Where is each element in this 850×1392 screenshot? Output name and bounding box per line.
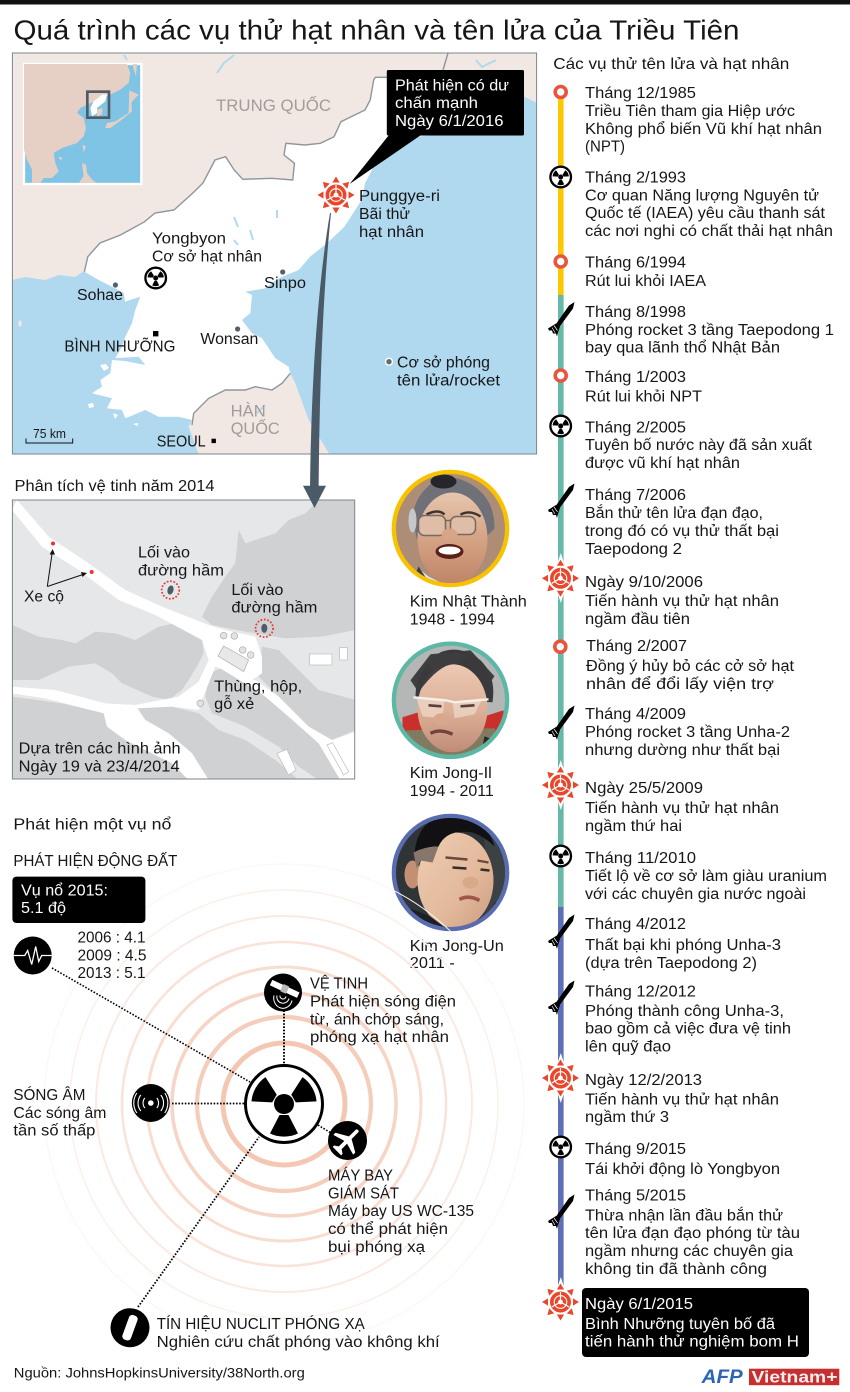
label: Yongbyon: Yongbyon xyxy=(152,231,226,248)
event: June 1994 xyxy=(555,255,707,290)
roads xyxy=(12,500,356,780)
event: July 2006: Tháng 7/2006 xyxy=(585,487,686,504)
label: sound waves xyxy=(13,1087,106,1140)
event: 25 May 2009 xyxy=(542,766,779,835)
event: November 2010: Tháng 11/2010 xyxy=(585,850,696,867)
event: February 2007 xyxy=(555,638,795,693)
label: surveillance plane: có thể phát hiện xyxy=(328,1221,448,1238)
panel frame xyxy=(12,500,355,779)
caption: Kim Jong-un xyxy=(410,938,504,972)
label: Sinpo: Sinpo xyxy=(264,275,306,292)
event: December 1985: Không phổ biến Vũ khí hạt nhân xyxy=(585,121,822,138)
portrait: Kim Jong-il xyxy=(392,642,509,759)
label: image dates: Dựa trên các hình ảnh xyxy=(19,741,181,758)
top bar xyxy=(0,0,850,4)
label: sound waves: Các sóng âm xyxy=(13,1105,106,1122)
label: Yongbyon xyxy=(152,231,262,266)
event: January 2003 xyxy=(555,369,703,406)
event: May 2015: tên lửa đạn đạo phóng từ tàu xyxy=(585,1225,800,1242)
heading: satellite analysis: Phân tích vệ tinh năm 2014 xyxy=(14,478,215,495)
seismic magnitudes: 2009 : 4.5 xyxy=(78,948,146,964)
source: Nguồn: JohnsHopkinsUniversity/38North.org xyxy=(14,1365,305,1381)
caption: Kim Il-sung: Kim Nhật Thành xyxy=(410,594,527,611)
label: radionuclide signal: TÍN HIỆU NUCLIT PHÓNG XẠ xyxy=(157,1316,365,1333)
seismic magnitudes: 2006 : 4.1 xyxy=(78,930,146,947)
inset locator map xyxy=(24,64,141,184)
event: June 1994: Tháng 6/1994 xyxy=(585,255,686,272)
event: September 2015 xyxy=(550,1137,780,1178)
label: surveillance plane xyxy=(328,1168,474,1256)
seismic magnitudes: 2013 : 5.1 xyxy=(78,965,146,982)
scale bar: 75 km xyxy=(33,427,66,441)
callout: 2015 magnitude: Vụ nổ 2015: xyxy=(21,882,108,900)
label: radionuclide signal: Nghiên cứu chất phóng vào không khí xyxy=(157,1334,440,1351)
label: Pyongyang xyxy=(64,331,175,356)
event: September 2015: Tái khởi động lò Yongbyon xyxy=(585,1161,780,1178)
borders xyxy=(84,53,448,425)
label: Pyongyang: BÌNH NHƯỠNG xyxy=(64,339,175,356)
icon: surveillance plane xyxy=(327,1120,368,1161)
label: radionuclide signal xyxy=(157,1316,440,1351)
event: July 2006: Taepodong 2 xyxy=(585,541,682,558)
dotted connectors xyxy=(52,968,331,1307)
event: February 2005: được vũ khí hạt nhân xyxy=(585,455,740,472)
event: February 2007: nhân để đổi lấy viện trợ xyxy=(586,676,774,693)
portrait: Kim Il-sung xyxy=(392,470,509,587)
West coast islands xyxy=(88,364,138,426)
event: April 2012: Thất bại khi phóng Unha-3 xyxy=(585,937,781,954)
rivers xyxy=(124,55,496,413)
event: April 2012: Tháng 4/2012 xyxy=(585,916,686,933)
event: June 1994: Rút lui khỏi IAEA xyxy=(585,273,707,290)
event: May 2015: không tin đã thành công xyxy=(585,1261,767,1278)
panel: map of North Korea xyxy=(12,53,537,455)
label: tunnel entrance 2: đường hầm xyxy=(231,600,317,617)
caption: Kim Jong-un: 2011 - xyxy=(410,955,455,972)
label: tunnel entrance 2: Lối vào xyxy=(231,582,283,599)
label: containers and lumber: Thùng, hộp, xyxy=(214,679,302,696)
event: December 2012: bao gồm cả việc đưa vệ tinh xyxy=(585,1021,791,1038)
event: 25 May 2009: Tiến hành vụ thử hạt nhân xyxy=(585,800,779,817)
callout: aftershock: Ngày 6/1/2016 xyxy=(395,113,504,130)
event: April 2012 xyxy=(548,914,781,972)
event: 25 May 2009: ngầm thứ hai xyxy=(585,818,682,835)
event: December 1985: Triều Tiên tham gia Hiệp ước xyxy=(585,103,795,120)
icon: sound waves xyxy=(132,1084,170,1122)
event: April 2009: Tháng 4/2009 xyxy=(585,706,686,723)
event: February 1993: Cơ quan Năng lượng Nguyên tử xyxy=(585,188,819,205)
label: Punggye-ri: hạt nhân xyxy=(359,224,424,241)
caption: Kim Jong-il xyxy=(410,765,494,800)
label: Yongbyon: Cơ sở hạt nhân xyxy=(152,249,262,266)
event: 12 February 2013: Tiến hành vụ thử hạt nhân xyxy=(585,1091,779,1108)
label: satellite: VỆ TINH xyxy=(310,976,368,993)
event: May 2015 xyxy=(548,1188,800,1278)
North Korea land xyxy=(84,78,388,420)
event: November 2010: Tiết lộ về cơ sở làm giàu uranium xyxy=(585,868,827,885)
event: July 2006: trong đó có vụ thử thất bại xyxy=(585,523,779,540)
event: December 2012: lên quỹ đạo xyxy=(585,1039,671,1056)
label: satellite xyxy=(310,976,456,1046)
icon: central radiation symbol xyxy=(246,1066,322,1142)
seismic magnitudes xyxy=(78,930,146,982)
event: September 2015: Tháng 9/2015 xyxy=(585,1141,686,1158)
event: February 2005: Tuyên bố nước này đã sản xuất xyxy=(585,437,813,454)
label: Sohae: Sohae xyxy=(77,287,123,304)
label: tunnel entrance 2 xyxy=(231,582,317,617)
heading: detecting an explosion: Phát hiện một vụ nổ xyxy=(13,816,171,833)
event: February 2007: Đồng ý hủy bỏ các cở sở hạt xyxy=(586,658,795,675)
label: China: TRUNG QUỐC xyxy=(216,95,331,115)
event: 9 October 2006: ngầm đầu tiên xyxy=(585,611,690,628)
event: April 2009: nhưng dường như thất bại xyxy=(585,742,780,759)
label: image dates: Ngày 19 và 23/4/2014 xyxy=(19,759,180,776)
South Korea land xyxy=(189,373,330,455)
event: August 1998: Tháng 8/1998 xyxy=(585,304,686,321)
China and Russia land xyxy=(12,53,537,280)
label: sound waves: tần số thấp xyxy=(13,1122,95,1140)
event: February 1993: Quốc tế (IAEA) yêu cầu thanh sát xyxy=(585,205,826,222)
map frame xyxy=(12,53,537,454)
heading: timeline: Các vụ thử tên lửa và hạt nhân xyxy=(553,56,789,73)
icon: Yongbyon radiation xyxy=(145,268,166,288)
event: February 2007: Tháng 2/2007 xyxy=(586,638,687,655)
label: sound waves: SÓNG ÂM xyxy=(13,1087,85,1104)
icon: satellite xyxy=(264,974,302,1012)
event: February 1993: Tháng 2/1993 xyxy=(585,170,686,187)
label: satellite: phóng xạ hạt nhân xyxy=(310,1029,449,1046)
event: July 2006 xyxy=(548,484,779,558)
label: Punggye-ri xyxy=(359,188,440,241)
event: December 2012 xyxy=(548,980,791,1056)
event: 12 February 2013: ngầm thứ 3 xyxy=(585,1109,669,1126)
caption: Kim Il-sung: 1948 - 1994 xyxy=(410,611,495,628)
logo: Vietnam+: Vietnam+ xyxy=(752,1368,838,1386)
event: January 2003: Tháng 1/2003 xyxy=(585,369,686,386)
event: April 2012: (dựa trên Taepodong 2) xyxy=(585,955,757,972)
arrow: map to satellite panel xyxy=(303,213,331,508)
event: May 2015: Thừa nhận lần đầu bắn thử xyxy=(585,1208,783,1225)
event: 9 October 2006 xyxy=(542,560,779,628)
event: August 1998: Phóng rocket 3 tầng Taepodong 1 xyxy=(585,322,834,339)
event: December 1985: Tháng 12/1985 xyxy=(585,85,696,102)
label: Punggye-ri: Bãi thử xyxy=(359,206,410,223)
event: 6 January highlighted: Bình Nhưỡng tuyên bố đã xyxy=(585,1316,775,1333)
legend: rocket launch base xyxy=(386,355,501,389)
label: image dates xyxy=(19,741,181,776)
icon: seismograph xyxy=(14,936,52,974)
label: surveillance plane: Máy bay US WC-135 xyxy=(328,1203,474,1220)
event: 6 January highlighted: tiến hành thử nghiệm bom H xyxy=(585,1334,799,1351)
label: surveillance plane: bụi phóng xạ xyxy=(328,1239,425,1256)
heading: seismic detection: PHÁT HIỆN ĐỘNG ĐẤT xyxy=(13,853,178,870)
event: August 1998: bay qua lãnh thổ Nhật Bản xyxy=(585,340,780,357)
event: December 2012: Tháng 12/2012 xyxy=(585,984,696,1001)
portrait: Kim Jong-un xyxy=(392,814,509,931)
label: South Korea xyxy=(231,402,280,438)
event: May 2015: Tháng 5/2015 xyxy=(585,1188,686,1205)
event: February 2005: Tháng 2/2005 xyxy=(585,420,686,437)
event: December 1985 xyxy=(555,85,822,156)
event: December 2012: Phóng thành công Unha-3, xyxy=(585,1003,784,1020)
event: 6 January highlighted: Ngày 6/1/2015 xyxy=(585,1296,693,1313)
callout: aftershock xyxy=(350,70,524,184)
event: January 2003: Rút lui khỏi NPT xyxy=(585,389,703,406)
caption: Kim Il-sung xyxy=(410,594,527,628)
legend: rocket launch base: tên lửa/rocket xyxy=(397,372,501,389)
label: containers and lumber xyxy=(214,679,302,713)
buildings xyxy=(218,646,249,672)
label: South Korea: HÀN xyxy=(231,402,266,421)
tunnel entrance markers xyxy=(162,581,273,637)
label: satellite: Phát hiện sóng điện xyxy=(310,994,456,1011)
event: 9 October 2006: Tiến hành vụ thử hạt nhân xyxy=(585,593,779,610)
logo: AFP: AFP xyxy=(701,1367,743,1388)
label: tunnel entrance 1: Lối vào xyxy=(138,545,190,562)
label: tunnel entrance 1 xyxy=(138,545,224,579)
event: May 2015: ngầm nhưng các chuyên gia xyxy=(585,1243,793,1260)
label: tunnel entrance 1: đường hầm xyxy=(138,562,224,579)
icon: Punggye-ri burst xyxy=(318,176,354,214)
event: 9 October 2006: Ngày 9/10/2006 xyxy=(585,574,703,591)
event: April 2009: Phóng rocket 3 tầng Unha-2 xyxy=(585,724,790,741)
label: containers and lumber: gỗ xẻ xyxy=(214,696,254,713)
label: Wonsan: Wonsan xyxy=(200,331,258,348)
event: July 2006: Bắn thử tên lửa đạn đạo, xyxy=(585,505,763,522)
caption: Kim Jong-il: Kim Jong-Il xyxy=(410,765,492,782)
shockwave rings xyxy=(44,864,524,1344)
caption: Kim Jong-un: Kim Jong-Un xyxy=(410,938,504,955)
callout: aftershock: Phát hiện có dư xyxy=(395,78,509,95)
timeline: vertical line xyxy=(558,92,564,1327)
vehicles annotation: Xe cộ xyxy=(24,589,64,606)
caption: Kim Jong-il: 1994 - 2011 xyxy=(410,783,494,800)
event: February 2005 xyxy=(550,416,813,472)
label: Punggye-ri: Punggye-ri xyxy=(359,188,440,205)
callout: 2015 magnitude: 5.1 độ xyxy=(21,900,66,917)
label: surveillance plane: GIÁM SÁT xyxy=(328,1186,399,1202)
panel: satellite analysis xyxy=(12,500,356,780)
title: Quá trình các vụ thử hạt nhân và tên lửa của Triều Tiên xyxy=(14,14,740,46)
legend: rocket launch base: Cơ sở phóng xyxy=(397,355,490,372)
vehicles annotation xyxy=(24,542,94,606)
event: February 1993: các nơi nghi có chất thải hạt nhân xyxy=(585,223,833,240)
event: 6 January highlighted xyxy=(542,1284,809,1357)
event: 12 February 2013: Ngày 12/2/2013 xyxy=(585,1072,702,1089)
event: December 1985: (NPT) xyxy=(585,138,625,156)
event: April 2009 xyxy=(548,706,790,759)
event: November 2010: với các chuyên gia nước ngoài xyxy=(585,886,806,903)
label: satellite: từ, ánh chớp sáng, xyxy=(310,1012,444,1029)
event: 25 May 2009: Ngày 25/5/2009 xyxy=(585,780,703,797)
event: 12 February 2013 xyxy=(542,1060,779,1126)
callout: aftershock: chấn mạnh xyxy=(395,95,478,112)
event: August 1998 xyxy=(548,302,834,357)
event: February 1993 xyxy=(550,167,833,240)
label: surveillance plane: MÁY BAY xyxy=(328,1168,393,1184)
callout: 2015 magnitude xyxy=(12,877,145,923)
scale bar xyxy=(26,427,73,443)
label: South Korea: QUỐC xyxy=(231,418,280,438)
event: November 2010 xyxy=(550,846,827,903)
label: Seoul: SEOUL xyxy=(157,434,206,451)
icon: radionuclide sample xyxy=(110,1308,150,1347)
